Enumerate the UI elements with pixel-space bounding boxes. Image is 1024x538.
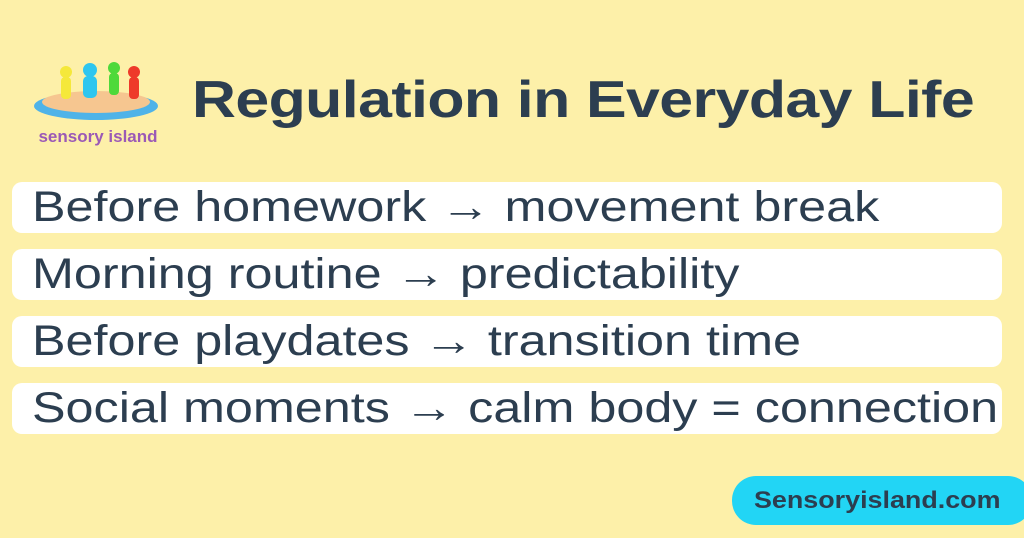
list item 4: Social moments → calm body = connection — [32, 384, 998, 432]
logo — [34, 62, 158, 146]
list item 1: Before homework → movement break — [32, 183, 879, 231]
icon: kids — [60, 62, 140, 99]
list item 3: Before playdates → transition time — [32, 317, 801, 365]
icon: island — [34, 91, 158, 120]
logo text: sensory island — [38, 127, 158, 146]
list item 2 — [12, 249, 1002, 300]
website badge: Sensoryisland.com — [754, 487, 1000, 514]
website badge — [732, 476, 1024, 525]
title: Regulation in Everyday Life — [192, 71, 974, 129]
list item 2: Morning routine → predictability — [32, 250, 739, 298]
